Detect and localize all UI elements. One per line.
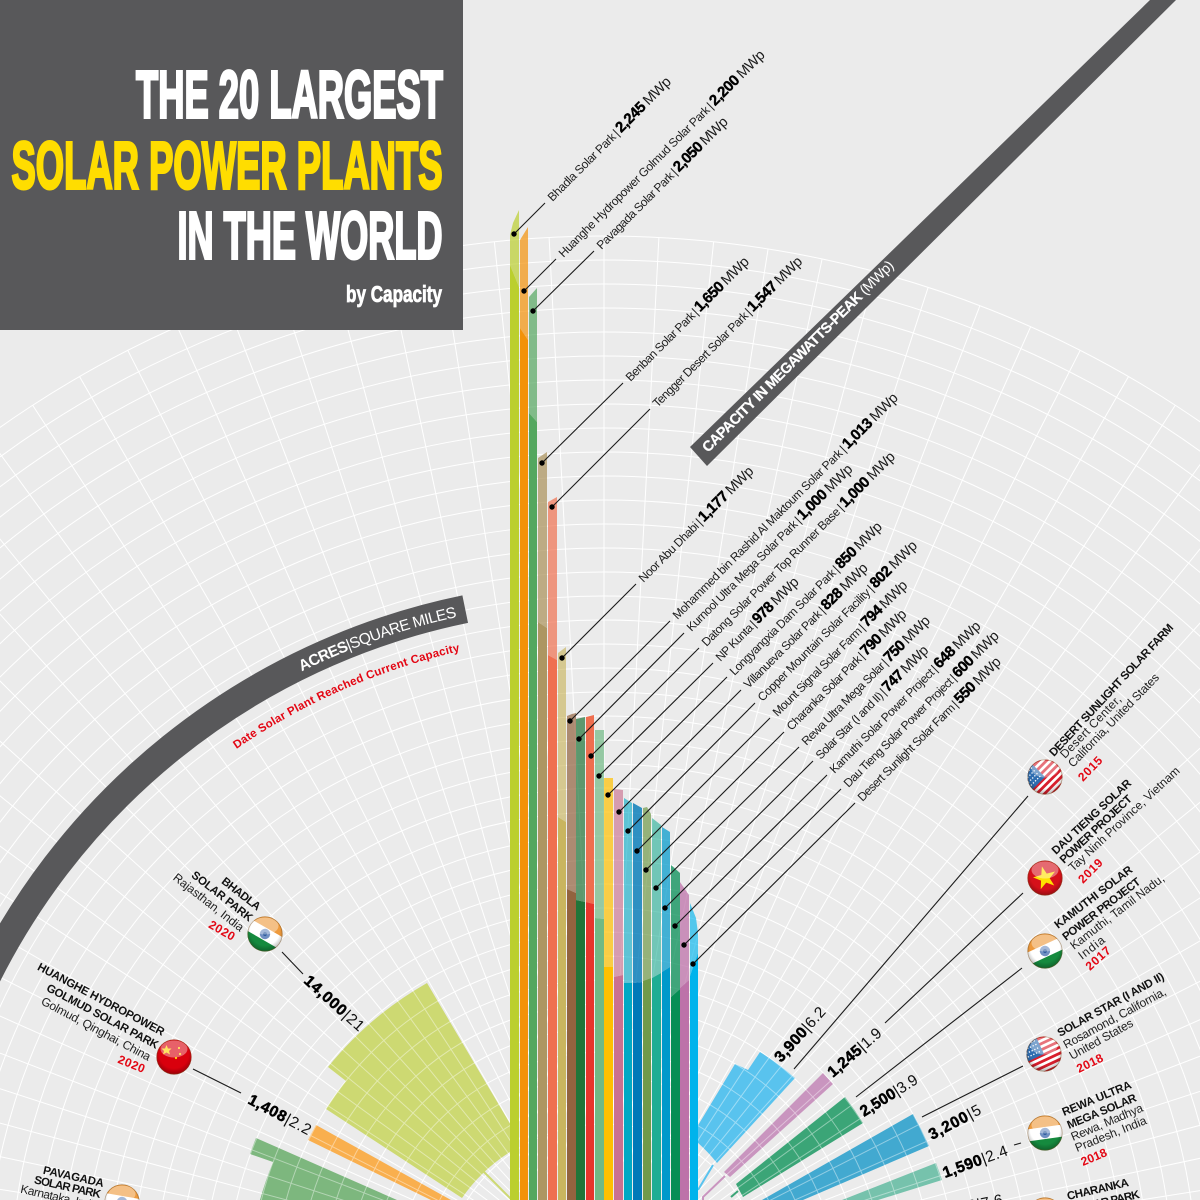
label: Noor Abu Dhabi [559, 463, 757, 661]
label: NP Kunta [596, 574, 803, 779]
plant name and location: SOLAR PARK [189, 869, 255, 925]
label: Bhadla Solar Park [511, 73, 675, 237]
plant name and location: Rajasthan, India [170, 870, 247, 935]
plant name and location: 2020 [116, 1052, 147, 1076]
band: capacity axis [690, 0, 1176, 466]
wedge: Desert Sunlight [697, 1052, 795, 1163]
plant name and location: India [1075, 933, 1108, 962]
label: Tengger Desert Solar Park: Tengger Desert Solar Park | 1,547 MWp [648, 253, 806, 411]
plant name and location: GOLMUD SOLAR PARK [44, 982, 161, 1052]
label: Desert Sunlight Solar Farm [690, 654, 1005, 967]
plant name and location: California, United States [1065, 670, 1162, 770]
label: Mount Signal Solar Farm: Mount Signal Solar Farm | 794 MWp [768, 577, 911, 720]
plant name and location [35, 961, 167, 1076]
bar: Dau Tieng [680, 882, 689, 1200]
label: Copper Mountain Solar Facility [625, 537, 921, 834]
plant name and location: DAU TIENG SOLAR [1050, 777, 1135, 857]
bar: Datong [586, 715, 594, 1200]
plant: Bhadla [170, 869, 292, 961]
label: Datong Solar Power Top Runner Base: Datong Solar Power Top Runner Base | 1,000 MWp [697, 448, 899, 650]
value: Rewa area: 1,590|2.4 [941, 1142, 1011, 1182]
subtitle: by capacity: by Capacity [346, 281, 442, 307]
plant name and location: 2018 [1079, 1145, 1109, 1169]
label: Rewa Ultra Mega Solar [653, 612, 934, 891]
plant: Rewa [1022, 1079, 1149, 1169]
label: Copper Mountain Solar Facility: Copper Mountain Solar Facility | 802 MWp [753, 537, 921, 705]
plant name and location: DESERT SUNLIGHT SOLAR FARM [1047, 622, 1176, 759]
flag: India [1018, 924, 1072, 978]
bar: Huanghe [520, 227, 528, 1200]
plant name and location [1061, 1079, 1149, 1169]
plant name and location [1056, 971, 1168, 1076]
plant name and location: PAVAGADA [42, 1165, 105, 1190]
label: Noor Abu Dhabi: Noor Abu Dhabi | 1,177 MWp [634, 463, 757, 586]
label: Mohammed bin Rashid Al Maktoum Solar Park: Mohammed bin Rashid Al Maktoum Solar Park | 1,013 MWp [668, 389, 902, 623]
plant name and location: HUANGHE HYDROPOWER [35, 961, 167, 1039]
label: Benban Solar Park: Benban Solar Park | 1,650 MWp [621, 253, 753, 385]
plant name and location: 2015 [1075, 753, 1106, 784]
title panel [0, 0, 463, 330]
band label: acres / square miles: ACRES|SQUARE MILES [300, 607, 456, 672]
plant name and location: MEGA SOLAR [1066, 1092, 1139, 1132]
plant: Kamuthi [1018, 864, 1167, 978]
bar chart: capacity bars [510, 210, 698, 1200]
label: Desert Sunlight Solar Farm: Desert Sunlight Solar Farm | 550 MWp [853, 654, 1005, 805]
wedge: Rewa [842, 1163, 942, 1200]
label: Kurnool Ultra Mega Solar Park: Kurnool Ultra Mega Solar Park | 1,000 MWp [682, 461, 856, 635]
label: Dau Tieng Solar Power Project [681, 627, 1003, 948]
wedge: Solar Star [762, 1114, 929, 1200]
flag: China [156, 1039, 192, 1075]
capacity labels with leader lines [511, 47, 1005, 967]
band label: capacity in megawatts-peak: CAPACITY IN MEGAWATTS-PEAK (MWp) [700, 258, 898, 456]
plant name and location: Pradesh, India [1073, 1113, 1149, 1155]
label: Rewa Ultra Mega Solar: Rewa Ultra Mega Solar | 750 MWp [797, 612, 934, 749]
plant name and location: REWA ULTRA [1061, 1079, 1134, 1119]
bar: Longyangxia [604, 778, 613, 1200]
bar: Pavagada [529, 288, 537, 1200]
plant name and location: KAMUTHI SOLAR [1053, 864, 1136, 931]
label: Mohammed bin Rashid Al Maktoum Solar Park [567, 389, 902, 724]
bar: Solar Star [662, 827, 670, 1200]
wedge: Bhadla [326, 983, 512, 1198]
bar: Rewa [652, 818, 661, 1200]
value: Desert Sunlight area: 3,900|6.2 [771, 1004, 829, 1066]
label: Pavagada Solar Park [530, 114, 732, 314]
value: Bhadla area: 14,000|21 [300, 972, 367, 1035]
bar: Benban [538, 452, 547, 1200]
wedges: site area by plant [250, 983, 942, 1200]
plant: Pavagada [19, 1165, 145, 1200]
wedge: Kamuthi [736, 1097, 863, 1197]
plant name and location: SOLAR STAR (I AND II) [1056, 971, 1167, 1040]
wedge: Pavagada [250, 1138, 397, 1200]
plant name and location: Golmud, Qinghai, China [39, 994, 153, 1064]
bar: Mount Signal [633, 803, 642, 1200]
plant name and location [1053, 864, 1167, 973]
bar: Desert Sunlight [690, 903, 698, 1200]
label: date reached capacity: Date Solar Plant Reached Current Capacity [232, 645, 458, 749]
plant: Dau Tieng [1025, 764, 1183, 898]
plant name and location: 2020 [206, 917, 238, 944]
flag: United States [1017, 749, 1073, 805]
plant name and location: Tay Ninh Province, Vietnam [1065, 764, 1183, 874]
value: Huanghe area: 1,408|2.2 [245, 1092, 314, 1139]
bar: Noor Abu Dhabi [558, 647, 566, 1200]
plant: Charanka [1024, 1177, 1142, 1200]
bar: NP Kunta [595, 730, 604, 1200]
label: Villanueva Solar Park [616, 560, 872, 815]
flag: India [1024, 1194, 1066, 1200]
plant: Desert Sunlight [1017, 622, 1176, 805]
wedge: Desert Sunlight stem [698, 1165, 713, 1190]
label: Kamuthi Solar Power Project [672, 618, 984, 929]
label: Kurnool Ultra Mega Solar Park [576, 461, 856, 742]
value: Dau Tieng area: 1,245|1.9 [824, 1025, 885, 1081]
flag: Vietnam [1027, 860, 1063, 896]
plant name and location: 2018 [1074, 1051, 1106, 1076]
wedge: Dau Tieng [724, 1073, 833, 1177]
bar: Mohammed bin Rashid [567, 713, 576, 1200]
wedge: Dau Tieng stem [703, 1176, 725, 1200]
plant name and location: United States [1067, 1016, 1136, 1063]
plant: Huanghe [35, 961, 194, 1077]
label: Solar Star (I and II) [662, 642, 932, 911]
plant name and location: POWER PROJECT [1061, 876, 1143, 943]
plant name and location: Rewa, Madhya [1069, 1101, 1145, 1144]
label: Tengger Desert Solar Park [549, 253, 806, 510]
label: Benban Solar Park [539, 253, 753, 466]
label: Kamuthi Solar Power Project: Kamuthi Solar Power Project | 648 MWp [825, 618, 984, 777]
leader lines from values to flags [193, 796, 1028, 1145]
plant name and location: 2019 [1075, 855, 1106, 886]
plant: Solar Star [1017, 971, 1168, 1081]
bar: Charanka [643, 807, 651, 1200]
flag: India [238, 907, 292, 961]
label: Longyangxia Dam Solar Park [605, 518, 886, 798]
label: Dau Tieng Solar Power Project: Dau Tieng Solar Power Project | 600 MWp [839, 627, 1003, 791]
title: in the world: IN THE WORLD [178, 198, 442, 274]
label: Mount Signal Solar Farm [634, 577, 911, 854]
title: solar power plants: SOLAR POWER PLANTS [12, 128, 442, 204]
wedge: Kamuthi stem [731, 1191, 738, 1197]
label: Huanghe Hydropower Golmud Solar Park: Huanghe Hydropower Golmud Solar Park | 2,200 MWp [554, 47, 769, 261]
bar: Kamuthi [671, 865, 680, 1200]
label: Villanueva Solar Park: Villanueva Solar Park | 828 MWp [739, 560, 872, 692]
plant name and location [19, 1165, 105, 1200]
label: Charanka Solar Park [643, 606, 910, 873]
wedge: Huanghe [308, 1125, 451, 1200]
area values [245, 972, 1011, 1200]
flag: United States [1017, 1027, 1071, 1081]
label: Charanka Solar Park: Charanka Solar Park | 790 MWp [782, 606, 910, 734]
plant name and location: Rosamond, California, [1061, 984, 1168, 1052]
label: NP Kunta: NP Kunta | 978 MWp [711, 574, 803, 665]
bar: Bhadla [510, 210, 519, 1200]
plant name and location: BHADLA [219, 876, 263, 913]
wedge: Bhadla stem [482, 1170, 512, 1200]
plant name and location: 2017 [1083, 943, 1114, 973]
label: Datong Solar Power Top Runner Base [588, 448, 899, 759]
bar: Copper Mountain [624, 798, 632, 1200]
label: Solar Star (I and II): Solar Star (I and II) | 747 MWp [811, 642, 932, 763]
plant name and location: POWER PROJECT [1058, 793, 1135, 866]
label: Longyangxia Dam Solar Park: Longyangxia Dam Solar Park | 850 MWp [725, 518, 886, 679]
flag: India [99, 1179, 145, 1200]
title: the 20 largest: THE 20 LARGEST [136, 58, 443, 132]
plant name and location: Kamuthi, Tamil Nadu, [1067, 871, 1167, 952]
value: Solar Star area: 3,200|5 [926, 1102, 984, 1144]
bar: Kurnool [576, 717, 585, 1200]
bar: Villanueva [614, 789, 623, 1200]
flag: India [1022, 1110, 1068, 1156]
band: acres and square miles axis [0, 595, 468, 982]
label: Pavagada Solar Park: Pavagada Solar Park | 2,050 MWp [592, 114, 732, 253]
label: Bhadla Solar Park: Bhadla Solar Park | 2,245 MWp [543, 73, 675, 205]
value: Kamuthi area: 2,500|3.9 [857, 1072, 921, 1120]
bar: Tengger [548, 497, 557, 1200]
plant name and location: Desert Center, [1057, 692, 1124, 761]
